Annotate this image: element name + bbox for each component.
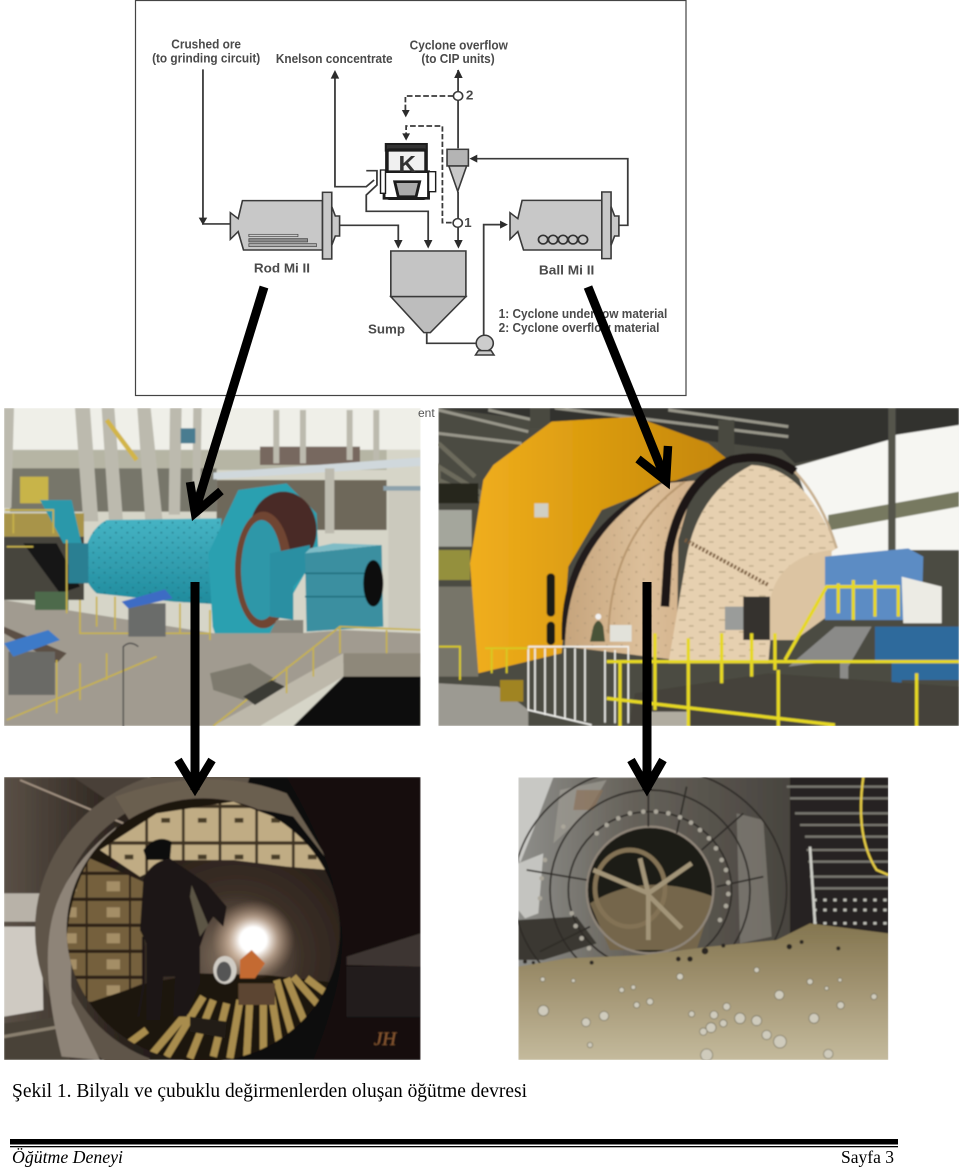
sample point 1: 1: [464, 215, 472, 230]
label: Rod Mill: Rod Mi II: [254, 261, 310, 275]
label: crushed ore: Crushed ore: [171, 37, 241, 52]
icon: sump tank: [391, 251, 466, 333]
sample point 2: [453, 88, 473, 103]
photo: large yellow ball mill: [438, 408, 959, 726]
icon: ball mill: [510, 192, 619, 259]
flow lines: [203, 69, 628, 343]
label: to grinding circuit: (to grinding circuit): [152, 51, 260, 66]
photo: worker inside rod mill: [4, 777, 421, 1080]
photo: ball mill interior: [513, 767, 888, 1061]
footer rule: [10, 1139, 898, 1147]
legend: 2: Cyclone overflow material: [499, 320, 659, 335]
label: Sump: Sump: [368, 322, 405, 337]
label: Ball Mill: Ball Mi II: [539, 263, 594, 277]
arrow: rod mill diagram to teal mill photo: [190, 287, 264, 513]
arrow: teal mill photo to interior photo: [178, 582, 212, 790]
icon: Knelson concentrator: K: [398, 152, 416, 177]
icon: rod mill: [230, 192, 340, 259]
sample point 1: [453, 215, 472, 230]
icon: pump: [476, 335, 494, 355]
label: to CIP units: (to CIP units): [421, 51, 495, 66]
stray text fragment: ent: [418, 406, 435, 420]
footer page number: Sayfa 3: [841, 1147, 894, 1167]
label: cyclone overflow: Cyclone overflow: [410, 38, 509, 52]
arrow: ball mill diagram to yellow mill photo: [588, 287, 668, 481]
photo: teal rod mill in plant: [4, 408, 421, 727]
arrow: yellow mill photo to interior photo: [631, 582, 663, 790]
icon: Knelson concentrator: [381, 144, 436, 198]
caption: Şekil 1. Bilyalı ve çubuklu değirmenlerden oluşan öğütme devresi: [12, 1081, 528, 1102]
footer left text: Öğütme Deneyi: [12, 1147, 123, 1167]
legend: 1: Cyclone underflow material: [499, 306, 667, 321]
sample point 2: 2: [466, 88, 473, 103]
icon: cyclone: [447, 149, 468, 191]
panel: grinding circuit flow diagram: [136, 0, 686, 396]
photo: worker inside rod mill: JH: [374, 1029, 397, 1050]
label: Knelson concentrate: Knelson concentrate: [276, 51, 393, 66]
arrowheads: [199, 69, 508, 249]
legend: [499, 306, 667, 335]
